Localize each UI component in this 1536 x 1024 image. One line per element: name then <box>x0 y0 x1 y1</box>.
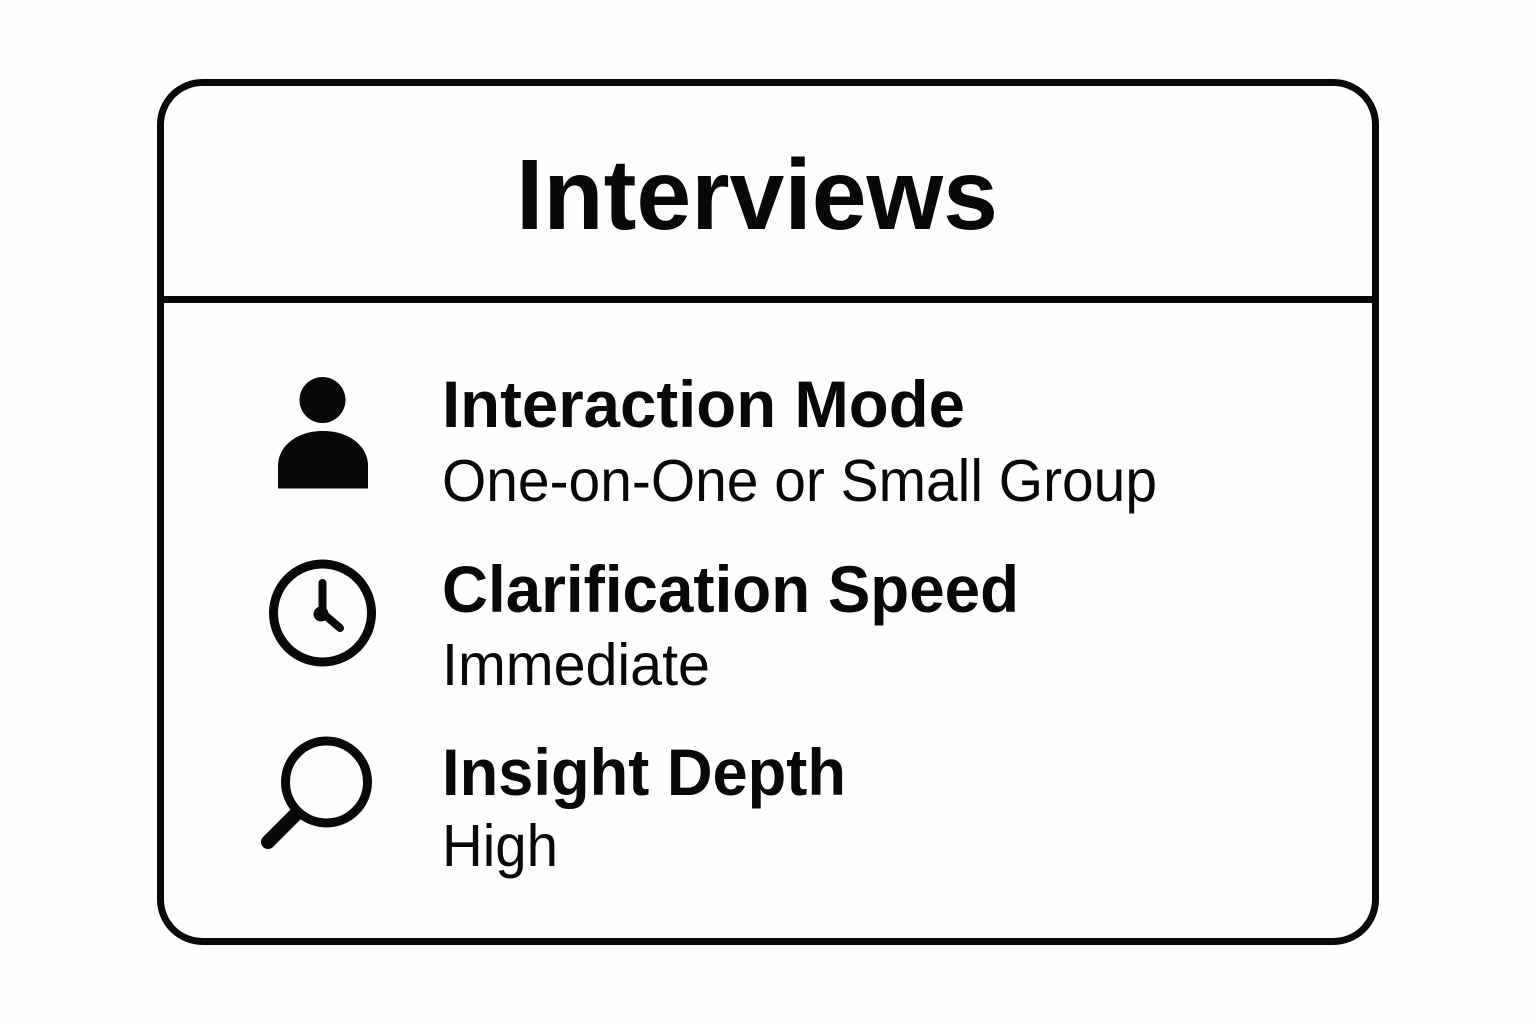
label: Clarification Speed: Clarification Speed <box>442 552 1019 626</box>
value: Immediate: Immediate <box>442 632 710 698</box>
value: One-on-One or Small Group: One-on-One or Small Group <box>442 448 1157 514</box>
icon: clock <box>274 564 372 662</box>
row: clarification speed <box>274 552 1019 698</box>
label: Interaction Mode: Interaction Mode <box>442 367 965 441</box>
icon: magnifying glass <box>268 741 368 842</box>
value: High: High <box>442 813 558 879</box>
row: insight depth <box>268 735 846 879</box>
row: interaction mode <box>278 367 1157 514</box>
panel: interviews card <box>160 82 1376 942</box>
icon: person <box>278 377 368 488</box>
heading: Interviews: Interviews <box>516 139 998 251</box>
label: Insight Depth: Insight Depth <box>442 735 846 809</box>
header divider <box>160 296 1376 303</box>
